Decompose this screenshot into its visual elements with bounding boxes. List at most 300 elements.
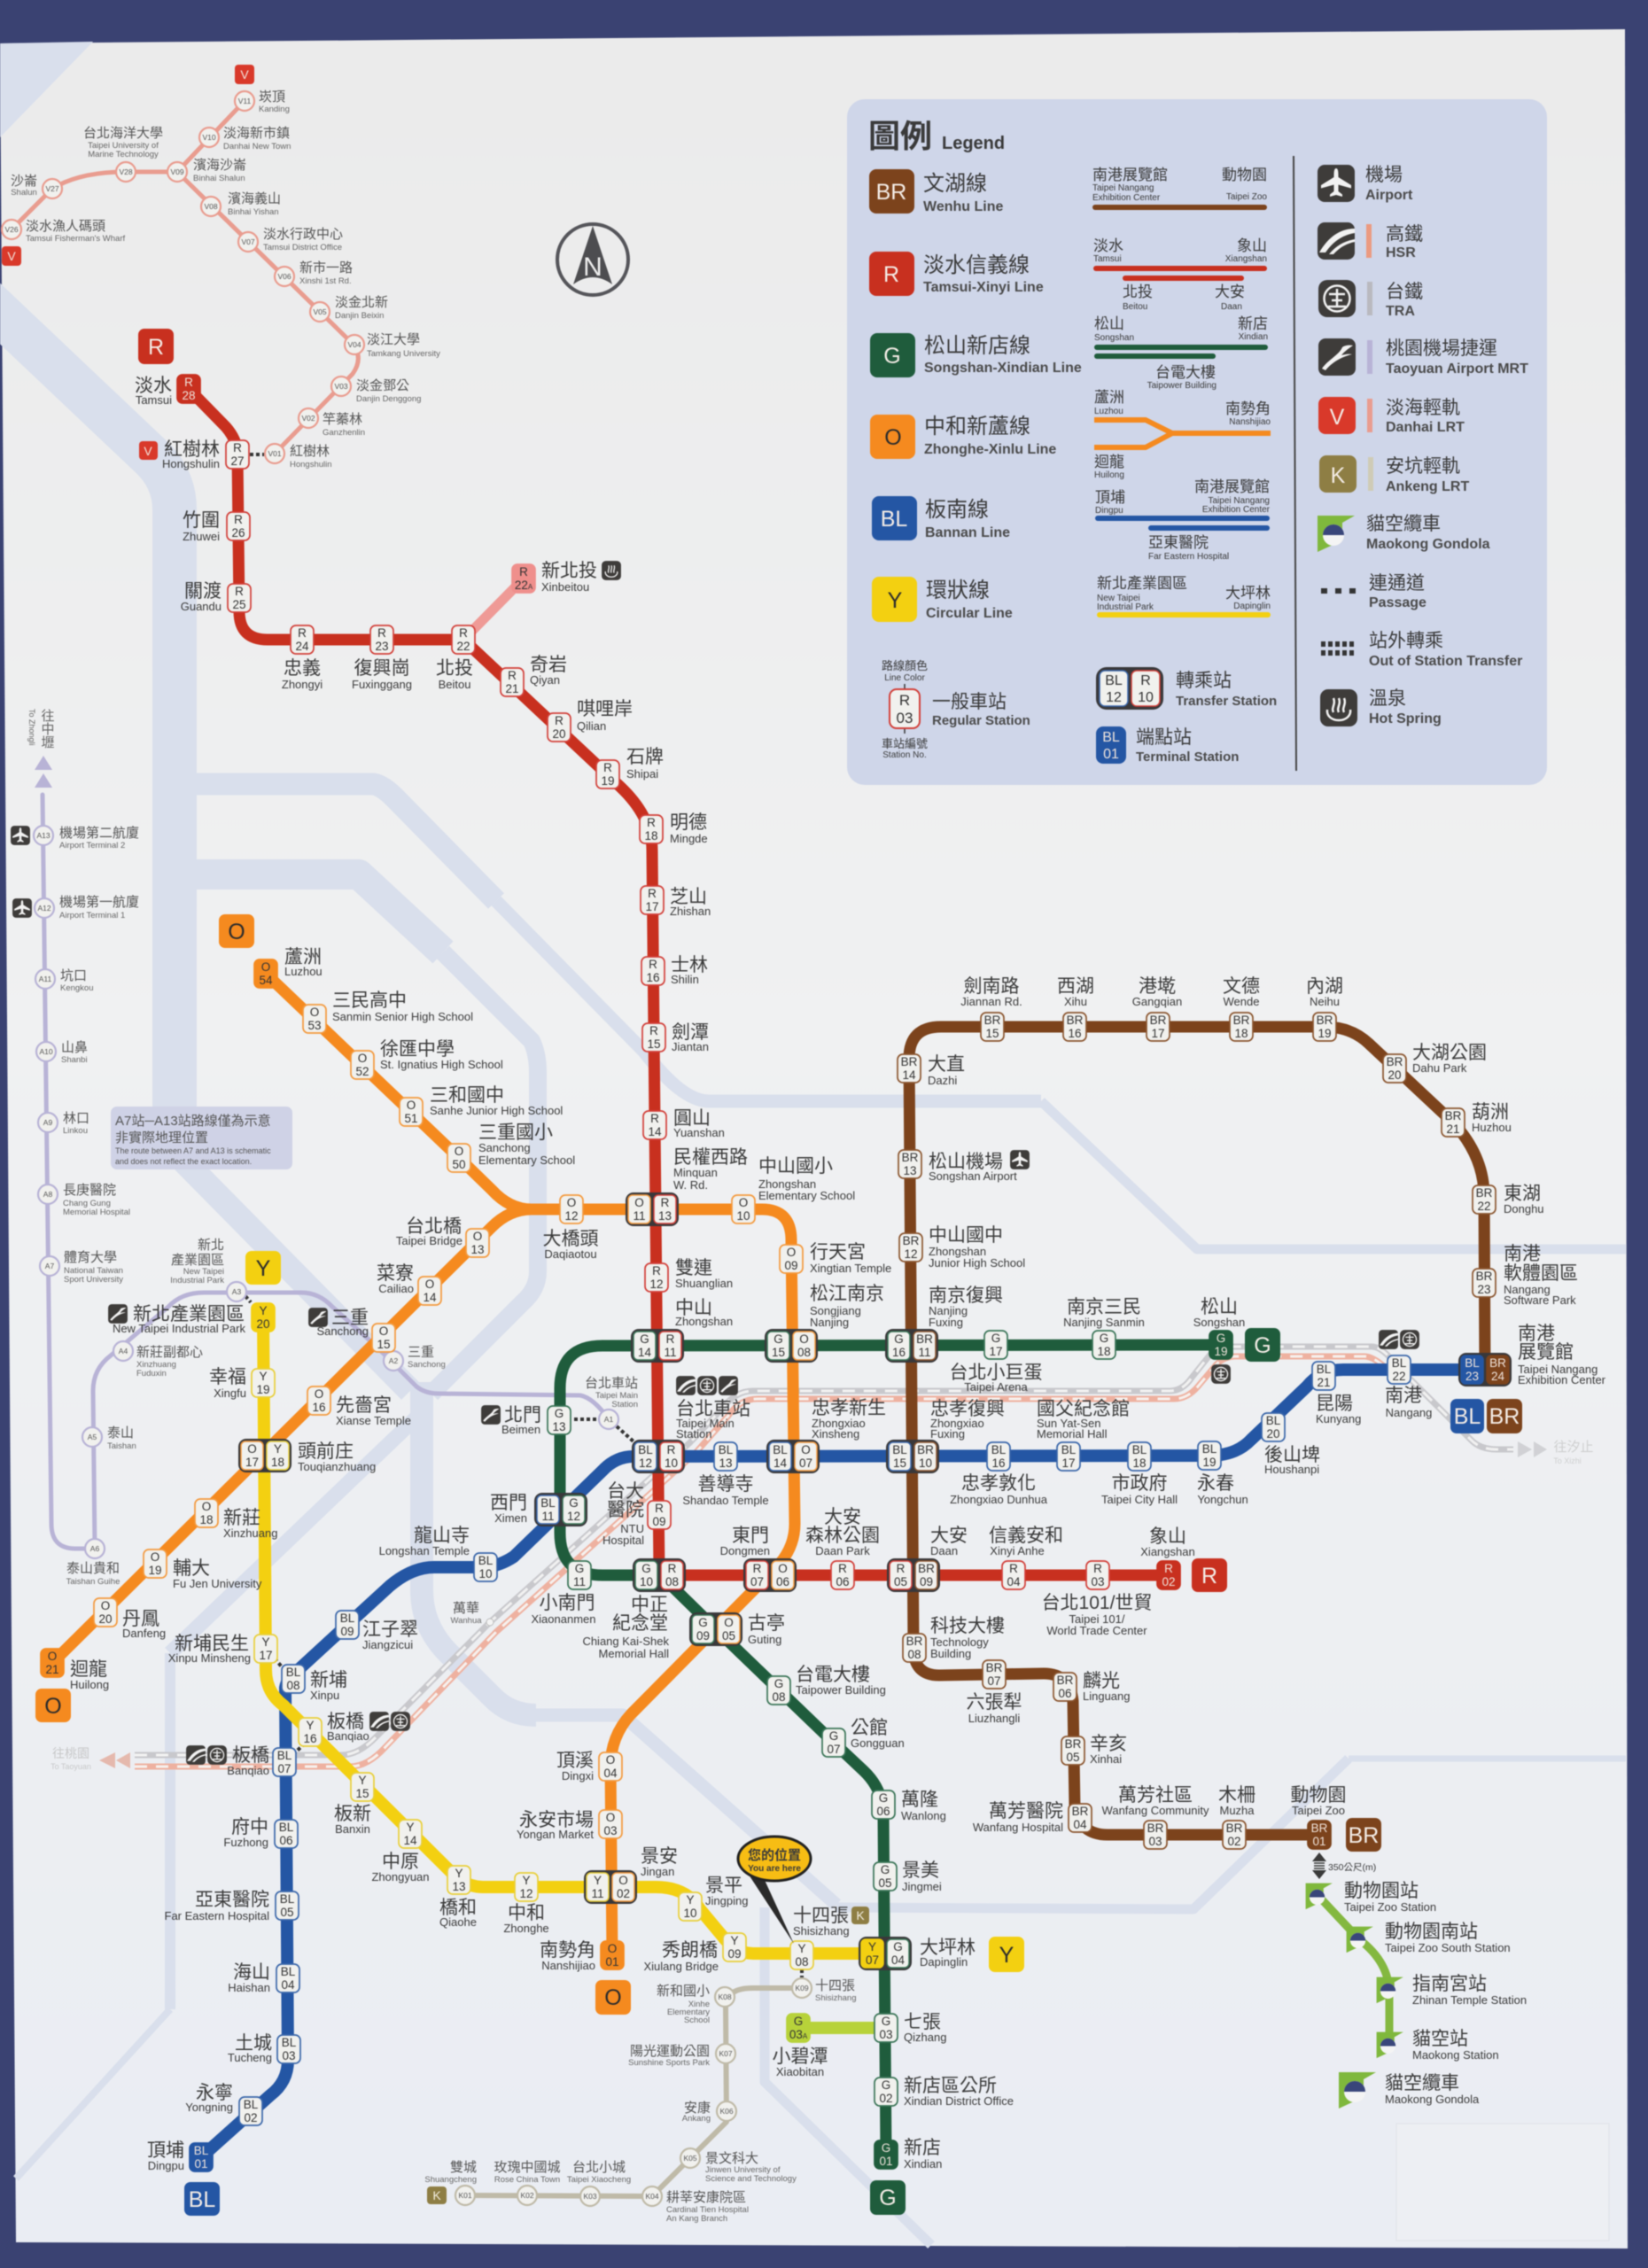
station BL18: 18	[1132, 1456, 1147, 1470]
station O52: 徐匯中學	[380, 1039, 455, 1060]
label G16 Nanjing Fuxing: Nanjing	[929, 1304, 968, 1317]
station BL10: Longshan Temple	[379, 1544, 470, 1557]
station A5	[82, 1425, 136, 1451]
direction: to Xizhi	[1518, 1440, 1594, 1465]
station V05: V05	[313, 307, 327, 316]
station Y16: 16	[303, 1732, 317, 1745]
transfer Y07 G04: 04	[891, 1953, 905, 1967]
station BR23: BR	[1476, 1270, 1493, 1283]
station BR13: 13	[903, 1164, 917, 1177]
station R03	[1042, 1561, 1152, 1637]
label O07 Zhongxiao Xinsheng: 忠孝新生	[812, 1398, 886, 1418]
station BL04: BL	[281, 1965, 296, 1978]
station G03: G	[882, 2015, 890, 2028]
station BR07: 六張犁	[966, 1692, 1022, 1713]
station K03: K03	[583, 2192, 597, 2201]
station R25: R	[235, 585, 244, 598]
station BL09: 09	[340, 1625, 354, 1638]
station G05: G	[881, 1863, 890, 1876]
station R18: 明德	[670, 812, 707, 833]
station R04	[989, 1526, 1063, 1589]
label G16 Nanjing Fuxing	[929, 1285, 1003, 1329]
station A13	[11, 825, 139, 850]
legend: Wenhu line: BR	[876, 180, 906, 205]
station BR18: Wende	[1224, 995, 1259, 1008]
legend: Bannan line	[872, 478, 1271, 562]
station A9: Linkou	[63, 1126, 88, 1136]
label O05 Guting: Guting	[748, 1633, 781, 1646]
station O54: 蘆洲	[284, 947, 322, 967]
station O01: 南勢角	[540, 1940, 595, 1961]
Circular line stations	[108, 1251, 1024, 1973]
transfer Y07 G04	[859, 1937, 912, 1970]
station R23: Fuxinggang	[352, 678, 412, 691]
station V28: 台北海洋大學	[83, 125, 163, 141]
station G02: Xindian District Office	[904, 2094, 1014, 2108]
station O53: 53	[307, 1019, 322, 1032]
station BR16	[1057, 976, 1094, 1041]
station V27: 沙崙	[11, 174, 37, 189]
station BR13	[898, 1150, 1030, 1183]
transfer BL14 O07: 14	[773, 1456, 787, 1470]
station K08: 新和國小	[657, 1984, 710, 1999]
legend: Bannan line: 南港展覽館	[1194, 478, 1270, 495]
station BR21	[1442, 1102, 1512, 1137]
station G06: 萬隆	[901, 1790, 938, 1810]
station R03: World Trade Center	[1046, 1624, 1147, 1637]
station O14: Cailiao	[378, 1282, 414, 1295]
station Y19: Xingfu	[214, 1386, 246, 1400]
station G19: Songshan	[1193, 1316, 1245, 1329]
station O12: O	[567, 1196, 576, 1209]
station BL18: BL	[1132, 1443, 1147, 1456]
transfer BL12 R10: BL	[638, 1443, 653, 1456]
station Y09: Y	[730, 1934, 739, 1947]
station G03A	[773, 2014, 828, 2078]
station K09: Shisizhang	[815, 1993, 856, 2003]
station BR21: 葫洲	[1472, 1102, 1509, 1122]
legend title: Legend	[942, 134, 1005, 153]
schematic note box	[111, 1107, 292, 1169]
station G08	[767, 1665, 886, 1705]
direction: to Taoyuan: 往桃園	[52, 1746, 89, 1760]
label O08 Songjiang Nanjing: Nanjing	[810, 1316, 849, 1329]
station BR19: 內湖	[1306, 976, 1343, 997]
station BL16	[950, 1442, 1048, 1506]
station R28: R	[184, 376, 193, 389]
legend: Taoyuan Airport MRT	[1318, 338, 1528, 377]
station V01	[265, 444, 332, 470]
transfer O17 Y18	[238, 1439, 292, 1472]
station Y20: Y	[259, 1304, 268, 1317]
station O13: 13	[470, 1243, 485, 1256]
station R14: R	[650, 1112, 659, 1125]
station A12: A12	[37, 904, 51, 913]
label R13 Minquan W. Rd.	[673, 1147, 748, 1192]
transfer BL15 BR10: 10	[919, 1456, 932, 1470]
station R15: 劍潭	[672, 1022, 709, 1043]
gondola station Taipei Zoo South: 動物園南站	[1385, 1922, 1478, 1942]
label BR10 Zhongxiao Fuxing	[930, 1399, 1005, 1441]
station O04: O	[606, 1753, 615, 1767]
station G08: 台電大樓	[796, 1665, 870, 1685]
station K01: 雙城	[450, 2160, 477, 2175]
station O50: Elementary School	[478, 1153, 575, 1167]
station Y09: Xiulang Bridge	[643, 1960, 719, 1973]
label G12 Ximen: 西門	[490, 1493, 527, 1513]
station BL08: Xinpu	[310, 1689, 339, 1702]
station BR18	[1223, 976, 1260, 1041]
station O54: 54	[259, 974, 273, 987]
station O09: 09	[784, 1259, 798, 1272]
badge R north: R	[148, 335, 164, 360]
station A9	[38, 1111, 89, 1136]
station BR04	[973, 1801, 1092, 1834]
station K04: 耕莘安康院區	[666, 2189, 746, 2205]
station K07: K07	[719, 2049, 733, 2058]
station K09: K09	[795, 1984, 809, 1992]
station BL06: 06	[279, 1834, 293, 1847]
station V26	[2, 219, 126, 244]
station BL06	[223, 1817, 298, 1849]
station BR05: Xinhai	[1090, 1752, 1122, 1766]
legend: Tamsui-Xinyi line: Tamsui	[1093, 254, 1122, 264]
legend: transfer station	[1096, 667, 1277, 710]
station BR22: 22	[1477, 1200, 1491, 1213]
station R26: 竹圍	[183, 510, 220, 531]
station R15	[642, 1022, 709, 1053]
legend: regular station: R	[899, 692, 910, 709]
station K01: Shuangcheng	[424, 2175, 477, 2185]
station K06	[682, 2101, 736, 2124]
label R11 Zhongshan: 中山	[675, 1298, 712, 1318]
station Y14	[371, 1820, 430, 1884]
station BL09: 江子翠	[362, 1619, 418, 1640]
transfer R05 BR09: R	[897, 1562, 906, 1575]
station A7: 體育大學	[64, 1249, 117, 1265]
transfer O17 Y18: Y	[274, 1442, 282, 1456]
station O20: O	[101, 1599, 110, 1612]
station A7: Sport University	[64, 1275, 123, 1285]
transfer R07 O06: 07	[750, 1575, 764, 1588]
station A7: National Taiwan	[64, 1266, 123, 1276]
station V05	[310, 295, 388, 322]
track: Danhai LRT	[12, 101, 358, 454]
station O13: O	[473, 1230, 482, 1243]
station O12: 12	[564, 1209, 579, 1223]
station A9: A9	[43, 1118, 52, 1127]
transfer Y11 O02: 11	[591, 1887, 604, 1900]
station O19: 輔大	[173, 1558, 210, 1579]
station BR14: 14	[902, 1068, 916, 1082]
gondola station Maokong: Maokong Station	[1412, 2048, 1499, 2062]
station R25: 25	[232, 598, 246, 611]
station A11	[35, 968, 94, 993]
badge V south	[2, 246, 21, 266]
station O10: O	[739, 1196, 748, 1209]
station K06: 安康	[684, 2101, 711, 2116]
station O09: Xingtian Temple	[810, 1262, 891, 1275]
station BR06: Linguang	[1083, 1689, 1131, 1703]
transfer G10 R08: R	[668, 1562, 677, 1575]
transfer O11 R13: R	[661, 1196, 670, 1209]
station BR20: 大湖公園	[1412, 1043, 1487, 1063]
legend: transfer station: 10	[1138, 690, 1154, 705]
transfer R05 BR09	[887, 1558, 940, 1592]
station R20: 20	[552, 727, 566, 741]
station Y13: 橋和	[439, 1898, 477, 1918]
station R24: 忠義	[284, 658, 321, 679]
label G12 Ximen: Ximen	[494, 1511, 527, 1525]
schematic note box: A7站─A13站路線僅為示意	[115, 1113, 271, 1129]
station BR23: 南港	[1504, 1244, 1541, 1264]
transfer G16 BR11: G	[894, 1332, 904, 1346]
station BL16: BL	[991, 1443, 1007, 1456]
label O07 Zhongxiao Xinsheng	[812, 1398, 886, 1441]
station R22: Beitou	[439, 678, 470, 691]
transfer G16 BR11: 11	[918, 1346, 931, 1359]
transfer Y07 G04: G	[893, 1940, 903, 1953]
station O14: 菜寮	[377, 1263, 414, 1284]
station O01: O	[608, 1942, 617, 1955]
legend: Zhonghe-Xinlu line: 蘆洲	[1094, 389, 1124, 406]
station A4	[113, 1341, 203, 1379]
label O02 Jingan	[641, 1846, 678, 1878]
legend: Circular line: 新北產業園區	[1097, 575, 1187, 592]
track: Maokong Gondola	[1318, 1896, 1389, 2045]
station V11: 崁頂	[259, 89, 285, 105]
station BL09: Jiangzicui	[362, 1638, 413, 1651]
station O54: O	[261, 960, 270, 974]
legend: Tamsui-Xinyi line: Tamsui-Xinyi Line	[923, 280, 1044, 295]
station O04	[556, 1751, 622, 1783]
station V10: V10	[202, 133, 216, 142]
station BR17: BR	[1150, 1014, 1167, 1027]
transfer G16 BR11: BR	[916, 1332, 933, 1346]
station O10: 10	[736, 1209, 750, 1223]
badge O north: O	[228, 920, 245, 944]
station Y08: Shisizhang	[793, 1924, 850, 1938]
station Y12: Zhonghe	[503, 1922, 549, 1935]
station A7	[40, 1249, 123, 1285]
station BR02	[1218, 1785, 1255, 1849]
station O01	[540, 1940, 624, 1972]
gondola connection arrow 350 m: 350公尺(m)	[1328, 1862, 1376, 1873]
gondola station Taipei Zoo: Taipei Zoo Station	[1344, 1900, 1436, 1914]
station BR04: 萬芳醫院	[989, 1801, 1063, 1821]
station A2: Sanchong	[408, 1360, 446, 1370]
legend: TRA: TRA	[1386, 304, 1415, 319]
label BL23 BR24 Taipei Nangang Exhibition Center: 南港	[1518, 1324, 1555, 1344]
station A3: A3	[232, 1287, 241, 1296]
station R21: 奇岩	[530, 655, 567, 675]
station BL13: 13	[719, 1456, 733, 1470]
station BL05	[165, 1890, 299, 1922]
station G13: 13	[552, 1420, 566, 1433]
station R19: 19	[601, 774, 615, 788]
station BL19	[1197, 1441, 1248, 1506]
badge V south: V	[7, 249, 16, 263]
legend: Wenhu line: 南港展覽館	[1092, 167, 1168, 183]
transfer BL23 BR24: 24	[1491, 1370, 1504, 1383]
label BL23 BR24 Taipei Nangang Exhibition Center: 展覽館	[1518, 1342, 1574, 1363]
station A8: A8	[43, 1190, 52, 1199]
station BL20: 後山埤	[1264, 1445, 1320, 1465]
station BR23: Nangang	[1504, 1283, 1551, 1296]
station BL19: 永春	[1197, 1473, 1234, 1494]
station BR01: BR	[1311, 1821, 1328, 1835]
station Y09	[643, 1933, 746, 1973]
transfer BL12 R10: 10	[665, 1456, 678, 1470]
legend: Taoyuan Airport MRT: 桃園機場捷運	[1386, 338, 1497, 359]
station G19: G	[1217, 1332, 1225, 1345]
label BR10 Zhongxiao Fuxing: Fuxing	[930, 1427, 965, 1441]
station O09	[780, 1242, 891, 1275]
legend: Songshan-Xindian line: 台電大樓	[1155, 364, 1216, 381]
gondola station Maokong	[1377, 2029, 1499, 2062]
legend: Danhai LRT: 淡海輕軌	[1386, 398, 1460, 418]
legend: transfer station: Transfer Station	[1176, 694, 1277, 709]
direction: to Zhongli: To Zhongli	[27, 709, 36, 746]
station A7: A7	[45, 1262, 54, 1270]
station BR15: Jiannan Rd.	[960, 995, 1022, 1008]
station BR03: 03	[1148, 1835, 1162, 1848]
station O19: 19	[148, 1564, 162, 1577]
station G06: 06	[876, 1805, 890, 1818]
station Y14: Y	[406, 1821, 415, 1834]
station R26: Zhuwei	[183, 530, 220, 543]
station BL02: 永寧	[196, 2083, 233, 2103]
station BL17: Memorial Hall	[1037, 1427, 1108, 1441]
badge BR south: BR	[1349, 1823, 1379, 1848]
station BR05	[1061, 1734, 1127, 1766]
station K02: Rose China Town	[494, 2175, 560, 2185]
station O18	[195, 1499, 277, 1540]
station K08	[657, 1984, 735, 2025]
passage connectors	[245, 454, 802, 1977]
station V05: Danjin Beixin	[335, 311, 384, 321]
station BL22	[1379, 1330, 1432, 1419]
station BR17	[1132, 976, 1182, 1041]
station R02: R	[1164, 1562, 1173, 1575]
station BL20: BL	[1266, 1414, 1281, 1427]
station R19: Shipai	[626, 767, 658, 781]
station R26: 26	[231, 526, 245, 540]
badge BL west: BL	[189, 2187, 215, 2212]
transfer G16 BR11: 16	[892, 1346, 906, 1359]
station BR14: BR	[901, 1055, 918, 1068]
station R16	[641, 955, 708, 986]
legend: TRA	[1318, 280, 1423, 319]
station A1	[585, 1376, 638, 1429]
station O53: 三民高中	[332, 990, 407, 1011]
station BR03: BR	[1147, 1821, 1164, 1835]
station R17: 芝山	[670, 887, 707, 907]
gondola station Taipei Zoo South: Taipei Zoo South Station	[1385, 1941, 1511, 1954]
station BR12: 中山國中	[929, 1225, 1003, 1246]
station G13	[481, 1405, 571, 1436]
legend: Bannan line: 頂埔	[1095, 489, 1125, 506]
legend: transfer station: 轉乘站	[1176, 671, 1232, 691]
station R19: R	[603, 761, 612, 774]
station A8: Chang Gung	[63, 1199, 111, 1208]
station R06: 06	[836, 1575, 850, 1588]
gondola station Zhinan Temple: 指南宮站	[1412, 1974, 1487, 1994]
legend: transfer station: R	[1140, 673, 1151, 688]
station O10	[732, 1156, 855, 1223]
transfer G14 R11: G	[640, 1332, 649, 1346]
label R13 Minquan W. Rd.: Minquan	[673, 1166, 718, 1179]
track: Songshan-Xindian line	[560, 1345, 1221, 2155]
station V08: 濱海義山	[228, 191, 281, 206]
legend: out of station transfer	[1321, 631, 1522, 669]
label R05 Daan	[930, 1526, 968, 1557]
station V10	[199, 126, 291, 151]
transfer G09 O05	[689, 1612, 742, 1646]
gondola connection arrow 350 m	[1312, 1852, 1376, 1879]
legend: terminal station	[1096, 726, 1239, 765]
station BL13: Shandao Temple	[682, 1494, 769, 1507]
station O12: 大橋頭	[542, 1229, 599, 1249]
station BL17: 國父紀念館	[1037, 1399, 1130, 1419]
station BL02: Yongning	[185, 2101, 233, 2114]
station R25: Guandu	[181, 600, 222, 613]
station R04: R	[1009, 1562, 1018, 1575]
station BR03: Wanfang Community	[1102, 1804, 1209, 1817]
label O08 Songjiang Nanjing: Songjiang	[810, 1304, 861, 1317]
station G18: G	[1100, 1332, 1108, 1345]
station BL04: Haishan	[228, 1981, 270, 1994]
transfer O11 R13: 13	[658, 1209, 672, 1223]
station Y08: 08	[795, 1955, 809, 1969]
station A9: 林口	[63, 1111, 89, 1126]
station BR16: BR	[1067, 1014, 1084, 1027]
station R22	[436, 625, 475, 691]
legend: Danhai LRT: V	[1330, 405, 1345, 430]
legend: Circular line: Y	[888, 588, 903, 613]
station R27	[139, 439, 249, 470]
station R06: 大安	[824, 1507, 861, 1527]
transfer G14 R11	[631, 1329, 684, 1363]
station G03A: 小碧潭	[773, 2047, 828, 2067]
label R13 Minquan W. Rd.: 民權西路	[673, 1147, 748, 1168]
legend: Circular line: Circular Line	[926, 606, 1013, 621]
badge R south	[1192, 1558, 1227, 1592]
station G02: 新店區公所	[904, 2076, 997, 2096]
station BR08: 08	[907, 1648, 921, 1661]
label O17 Touqianzhuang	[298, 1441, 376, 1473]
transfer BL11 G12: 11	[541, 1510, 555, 1523]
label BL23 BR24 Taipei Nangang Exhibition Center	[1518, 1324, 1606, 1386]
station BL08: 新埔	[310, 1670, 347, 1690]
station R27: V	[144, 444, 152, 458]
station BL06: 府中	[231, 1817, 268, 1837]
station BR20: BR	[1387, 1055, 1403, 1068]
station Y15	[334, 1773, 374, 1836]
transfer G15 O08: 15	[772, 1346, 785, 1359]
station BR05: 辛亥	[1090, 1734, 1127, 1754]
station Y15: Banxin	[335, 1822, 370, 1836]
station BL04	[228, 1962, 299, 1994]
label BL23 BR24 Taipei Nangang Exhibition Center: Taipei Nangang	[1518, 1363, 1597, 1376]
station Y19	[209, 1367, 275, 1400]
station BR14: 大直	[928, 1054, 965, 1075]
station V09: V09	[170, 167, 184, 176]
legend: Wenhu line: 文湖線	[923, 172, 987, 196]
station BR22: BR	[1476, 1186, 1493, 1200]
station K03	[567, 2160, 631, 2206]
station R22: 22	[456, 640, 470, 653]
